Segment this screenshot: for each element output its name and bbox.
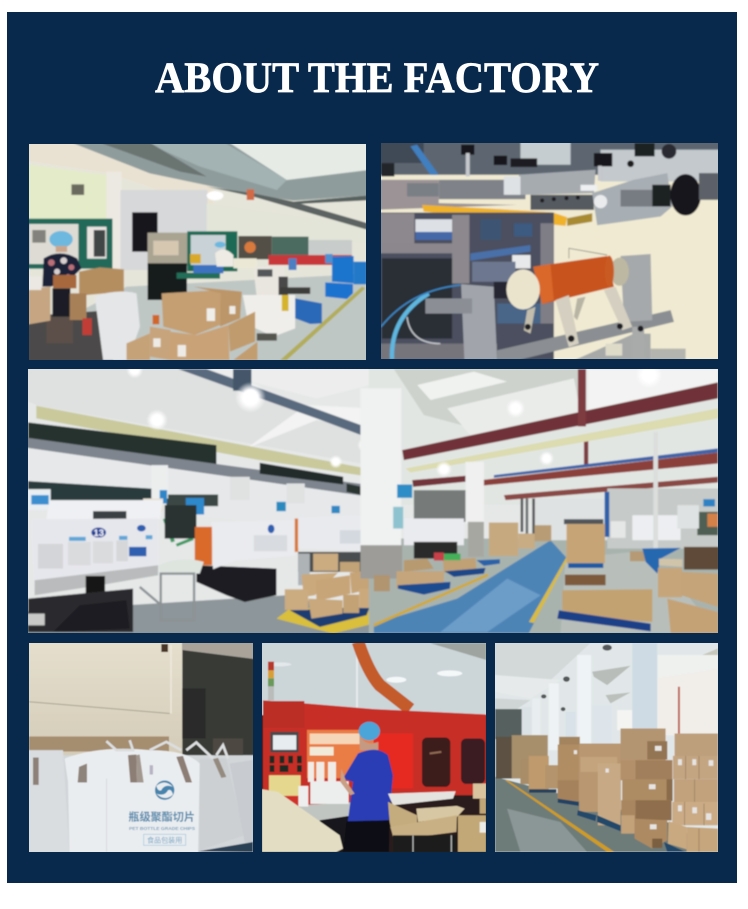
wall [20, 635, 183, 755]
floor [20, 273, 374, 370]
operator [340, 722, 393, 852]
bag label text: 食品包装用 [147, 835, 182, 844]
floor [374, 540, 718, 633]
dark doorway [132, 212, 158, 252]
machine 12 [212, 515, 371, 585]
columns [360, 388, 484, 579]
yellow squeegee bar [422, 205, 592, 226]
foreground pallet [557, 575, 652, 631]
photo: PET chip bulk bags [29, 643, 253, 852]
right carton stack [664, 733, 718, 852]
stack light [268, 662, 274, 700]
maroon beams [402, 369, 718, 500]
photo: blow moulding operator [262, 643, 486, 852]
dark opening [182, 635, 262, 755]
yellow floor line [505, 780, 615, 852]
red machine body [263, 700, 486, 809]
left green machine [20, 219, 112, 269]
carton stack [127, 287, 257, 360]
open carton [388, 784, 486, 852]
blue air hoses [381, 285, 460, 359]
far doorway [495, 709, 522, 739]
hoppers and robots [28, 465, 340, 545]
floor [495, 777, 718, 852]
photo: packaging workshop [29, 144, 366, 360]
bottom rails [497, 310, 686, 360]
right slider and knob [581, 173, 719, 225]
main carton stack [621, 728, 673, 849]
ceiling lamps [541, 645, 612, 711]
grey cabinet with shelves [374, 213, 554, 364]
ceiling beams [495, 643, 718, 745]
white wrapping machine [233, 258, 310, 341]
machine 13 [28, 500, 163, 632]
bag label text: 瓶级聚酯切片 [128, 810, 195, 824]
upper machinery [374, 136, 727, 181]
bulk bags [20, 740, 263, 859]
blue crates [295, 254, 367, 324]
cartons behind bags [29, 736, 169, 752]
left ceiling and wall bands [20, 365, 370, 532]
carton labels [574, 746, 713, 829]
frame outline on wall [569, 248, 607, 258]
mid carton stacks [558, 743, 621, 831]
plastic bag [95, 291, 140, 360]
right carton stack [658, 547, 719, 633]
silver carriage [374, 170, 596, 210]
orange duct [358, 642, 410, 709]
photo: injection moulding hall [28, 369, 718, 633]
machine 13: 13 [94, 528, 104, 538]
sack in foreground [262, 789, 343, 852]
photo: carton warehouse [495, 643, 718, 852]
steel beam [178, 369, 370, 438]
green machine and cabinet [148, 231, 352, 300]
white roller arms [524, 287, 644, 347]
right half of hall [360, 362, 722, 635]
left cartons [20, 267, 124, 335]
upright brackets [425, 254, 652, 360]
ceiling lamps [126, 362, 372, 468]
far carton stacks [496, 735, 580, 793]
near-left cartons [374, 553, 500, 595]
columns [522, 643, 680, 750]
mid carton stack [489, 523, 551, 556]
worker with blue cap [42, 231, 81, 343]
conveyor and bottles [298, 762, 360, 852]
ceiling duct [56, 137, 374, 232]
carton pallet centre [276, 554, 383, 634]
photo: screen printing machine [381, 143, 718, 359]
orange print cylinder [506, 256, 629, 310]
orange machine and table [140, 527, 276, 620]
bag logo [155, 781, 174, 800]
bag label text [128, 810, 195, 845]
bag label text: PET BOTTLE GRADE CHIPS [129, 826, 195, 831]
centre pallet of cartons [564, 519, 681, 574]
back wall and machines [404, 432, 719, 559]
floor [20, 595, 383, 639]
